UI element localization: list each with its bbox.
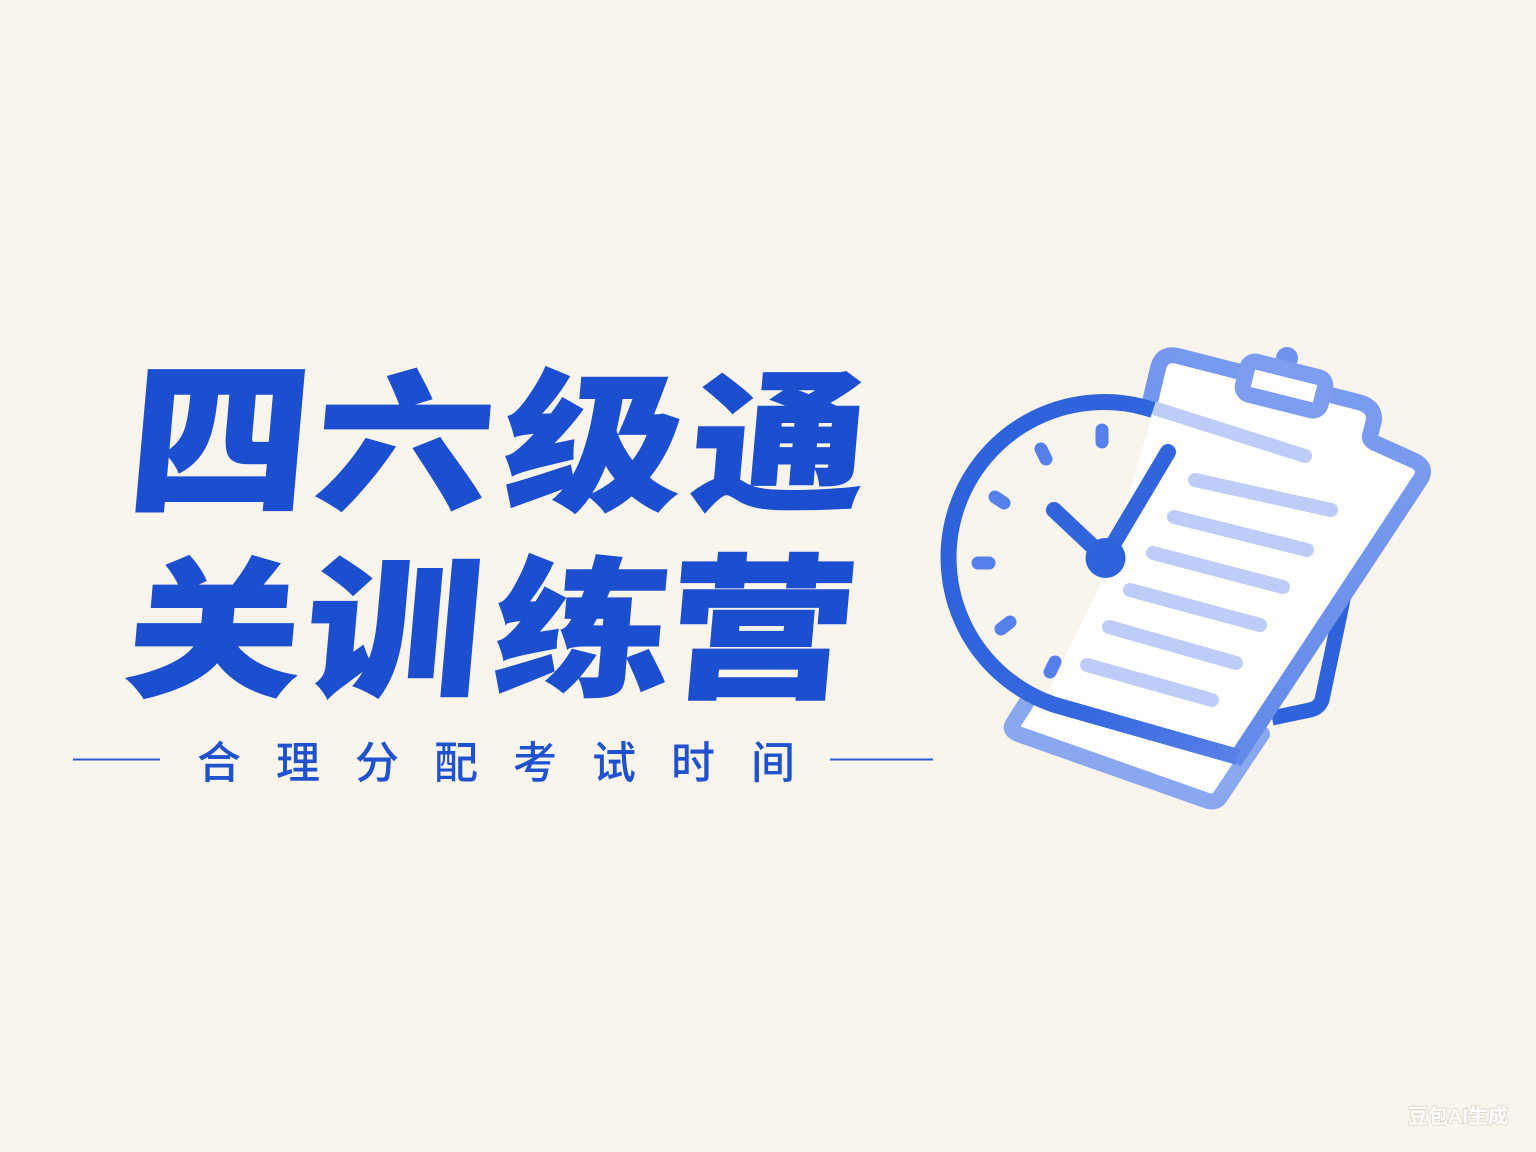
subtitle text: 试: [592, 739, 636, 788]
subtitle text: 合: [197, 739, 241, 788]
clipboard outline: [1150, 355, 1423, 762]
title: 四六级通关训练营: [120, 348, 874, 718]
subtitle text: 时: [671, 739, 715, 788]
title line 1: [121, 348, 874, 538]
title line 2: 营: [660, 545, 864, 718]
icon: clipboard and clock: [949, 347, 1424, 802]
title line 2: 关: [120, 549, 309, 716]
back sheet dark edge: [1272, 590, 1345, 718]
subtitle text: 配: [434, 739, 478, 788]
subtitle text: 间: [751, 739, 795, 788]
subtitle text: 理: [276, 739, 320, 788]
subtitle text: 分: [355, 739, 399, 788]
subtitle text: 考: [513, 739, 557, 788]
subtitle with side rules: [73, 739, 933, 788]
clock hub: [1086, 538, 1126, 578]
title line 1: 通: [685, 361, 874, 530]
back sheet light outline: [1012, 697, 1262, 802]
subtitle text: [197, 739, 795, 788]
clock tick marks: [978, 430, 1102, 672]
clipboard clip: [1241, 360, 1327, 412]
title line 1: 六: [309, 361, 501, 530]
watermark: 豆包AI生成: [1408, 1104, 1508, 1128]
title line 2: 训: [299, 548, 490, 716]
clock hands: [1054, 452, 1168, 558]
title line 2: 练: [488, 548, 679, 716]
back sheet white page: [1011, 600, 1340, 801]
title line 1: 四: [121, 348, 319, 538]
title line 2: [120, 545, 864, 718]
clock ring and clipboard bottom edge: [949, 402, 1238, 757]
clipboard white page: [1048, 355, 1424, 760]
clipboard clip knob: [1276, 347, 1298, 369]
text lines on clipboard: [1087, 409, 1331, 700]
title line 1: 级: [497, 362, 690, 531]
